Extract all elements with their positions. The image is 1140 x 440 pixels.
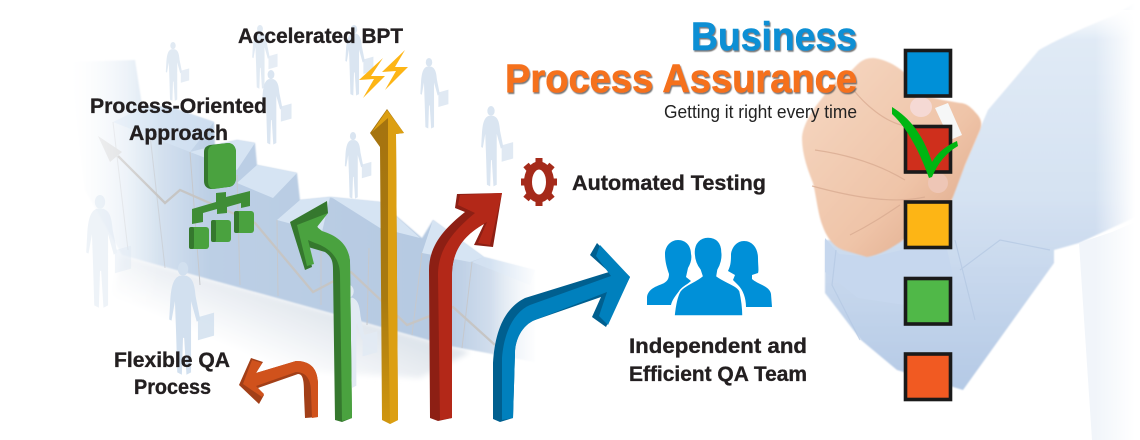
icon: lightning bolts (359, 50, 408, 98)
heading: title (505, 15, 857, 101)
heading: title: Business (691, 15, 857, 59)
icon: process flow chart (189, 143, 254, 249)
block edges (113, 122, 472, 348)
green checkbox (906, 278, 950, 324)
label: Flexible QA Process: Process (134, 376, 211, 399)
arrow: red (429, 193, 502, 421)
cuff (825, 238, 955, 305)
centre person (674, 237, 743, 316)
label: Process-Oriented Approach: Approach (129, 122, 228, 145)
blue checkbox (906, 50, 950, 96)
right edge fade (1095, 0, 1135, 440)
label: Accelerated BPT: Accelerated BPT (238, 25, 403, 48)
label: Independent and Efficient QA Team: Independent and (629, 335, 807, 358)
finger nails (910, 97, 932, 117)
orange checkbox (906, 354, 950, 400)
arrow: blue (493, 243, 630, 422)
chart line with arrow (98, 136, 495, 345)
arrow: gold (370, 109, 404, 424)
red checkbox (906, 126, 950, 172)
flow child boxes (189, 211, 254, 249)
heading: title: Process Assurance (505, 57, 857, 101)
wall right fade (490, 250, 540, 370)
finger lines (812, 88, 925, 235)
label: Process-Oriented Approach: Process-Oriented (90, 95, 267, 118)
panel: pale business people (86, 25, 513, 388)
label: Independent and Efficient QA Team: Efficient QA Team (629, 363, 807, 386)
left fade overlay (50, 30, 160, 370)
label: Flexible QA Process: Flexible QA (114, 349, 230, 372)
right person (728, 241, 772, 307)
arrow: orange (239, 358, 318, 418)
label: Flexible QA Process (114, 349, 230, 399)
stair blocks front (70, 60, 535, 362)
flow top box (204, 143, 236, 189)
panel: checklist squares (906, 50, 950, 400)
label: Process-Oriented Approach (90, 95, 267, 145)
shirt sleeve (825, 0, 1140, 390)
label: Automated Testing: Automated Testing (572, 172, 766, 195)
arrow: green (290, 201, 352, 422)
hand (802, 58, 981, 257)
icon: red gear (521, 158, 557, 206)
label: Independent and Efficient QA Team (629, 335, 807, 386)
icon: team of people (647, 237, 772, 316)
floor (110, 255, 470, 378)
panel: background staircase chart (70, 60, 535, 378)
sleeve folds (832, 240, 1050, 340)
top fade (1030, 10, 1140, 40)
shirt body (1079, 220, 1140, 440)
left person (647, 240, 691, 305)
panel: right-hand photo (802, 0, 1140, 440)
flow connector (192, 191, 250, 224)
pen (935, 103, 962, 140)
yellow checkbox (906, 202, 950, 248)
icon: green check mark (892, 107, 958, 178)
text: tagline: Getting it right every time (664, 102, 857, 122)
stair block tops (113, 107, 535, 285)
